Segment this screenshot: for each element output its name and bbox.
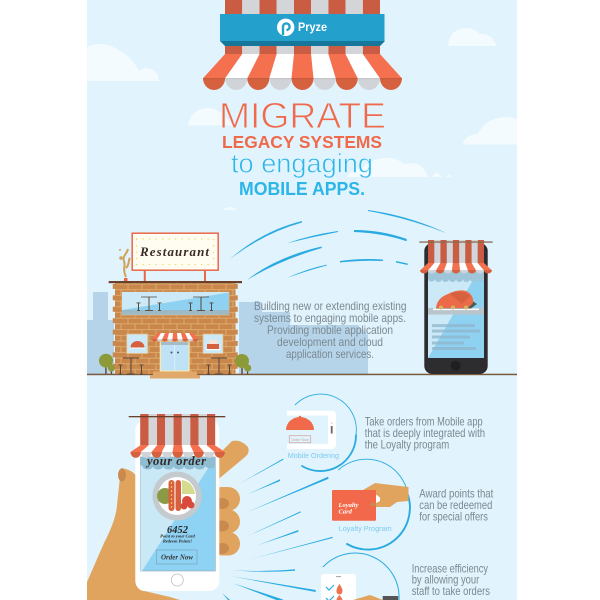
- burst lines: [222, 458, 333, 600]
- loyalty program circle: [332, 459, 410, 550]
- icon: roast turkey: [436, 290, 477, 310]
- phone awning: [129, 414, 225, 458]
- icon: loyalty card in hand: [332, 483, 408, 521]
- clouds: [87, 28, 517, 210]
- mobile ordering circle: [286, 394, 356, 471]
- loyalty program text: Award points that: [419, 487, 494, 501]
- paragraph: Providing mobile application: [267, 323, 393, 337]
- title: to engaging: [231, 148, 373, 178]
- staff ordering circle: [321, 553, 399, 600]
- mobile ordering text: the Loyalty program: [365, 437, 449, 451]
- logo wordmark: Pryze: [298, 22, 327, 34]
- restaurant sign: Restaurant: [139, 244, 209, 259]
- icon: pryze logo: [277, 19, 294, 36]
- title: MIGRATE: [219, 95, 386, 136]
- city skyline: [87, 292, 368, 374]
- hand palm and thumb: [87, 468, 180, 600]
- title: MOBILE APPS.: [239, 178, 365, 199]
- chimney smoke: [119, 249, 130, 292]
- title: LEGACY SYSTEMS: [222, 132, 382, 152]
- cafe tables: [118, 358, 232, 374]
- door: [160, 342, 190, 372]
- paragraph: [254, 299, 406, 361]
- title: [219, 95, 386, 199]
- points text: 6452: [167, 525, 189, 536]
- phone screen: [140, 454, 216, 571]
- staff ordering text: [412, 561, 490, 598]
- paragraph: application services.: [286, 347, 374, 361]
- ground line: [87, 374, 517, 375]
- phone awning: [419, 240, 493, 274]
- background panel: [87, 0, 517, 600]
- white phone body: [135, 420, 219, 591]
- food plate: [152, 472, 202, 520]
- icon: horizontal phone with cloche: Order Now: [291, 438, 309, 442]
- order now button: Order Now: [161, 554, 193, 562]
- curved signal lines: [230, 210, 447, 280]
- icon: loyalty card in hand: Loyalty: [338, 502, 358, 509]
- lower right window: [203, 334, 223, 354]
- upper window: [121, 292, 230, 316]
- phone screen: [428, 270, 484, 358]
- icon: loyalty card in hand: Card: [338, 508, 353, 516]
- staff ordering text: staff to take orders: [412, 584, 490, 598]
- home button: [451, 361, 461, 371]
- loyalty program text: for special offers: [419, 509, 488, 523]
- points text: Point to your Card: [160, 534, 196, 538]
- hand holding phone: [87, 414, 249, 600]
- loyalty program text: [419, 487, 494, 523]
- your order heading: your order: [145, 454, 206, 468]
- staff ordering text: Increase efficiency: [412, 561, 488, 575]
- points text: Redeem Points!: [163, 538, 192, 543]
- points text: [160, 525, 196, 543]
- door awning: [152, 333, 198, 342]
- paragraph: systems to engaging mobile apps.: [254, 311, 406, 325]
- top awning with logo sign: [203, 0, 402, 90]
- restaurant sign: [132, 233, 218, 282]
- staff ordering text: by allowing your: [412, 573, 479, 587]
- menu lines: [432, 326, 480, 348]
- icon: checklist phone in hand: [321, 574, 398, 600]
- mobile ordering text: Take orders from Mobile app: [365, 414, 483, 428]
- trees: [99, 354, 251, 374]
- index finger: [215, 441, 249, 482]
- home button: [171, 574, 183, 586]
- fingers: [210, 487, 240, 556]
- label: Mobile Ordering: [288, 451, 339, 460]
- paragraph: Building new or extending existing: [254, 299, 406, 313]
- loyalty program text: can be redeemed: [419, 498, 492, 512]
- paragraph: development and cloud: [277, 335, 383, 349]
- label: Loyalty Program: [339, 524, 392, 533]
- mobile ordering text: [365, 414, 485, 451]
- lower left window: [127, 334, 148, 354]
- restaurant building: [99, 233, 251, 378]
- phone with turkey: [419, 240, 493, 374]
- steps: [150, 372, 200, 378]
- mobile ordering text: that is deeply integrated with: [365, 426, 485, 440]
